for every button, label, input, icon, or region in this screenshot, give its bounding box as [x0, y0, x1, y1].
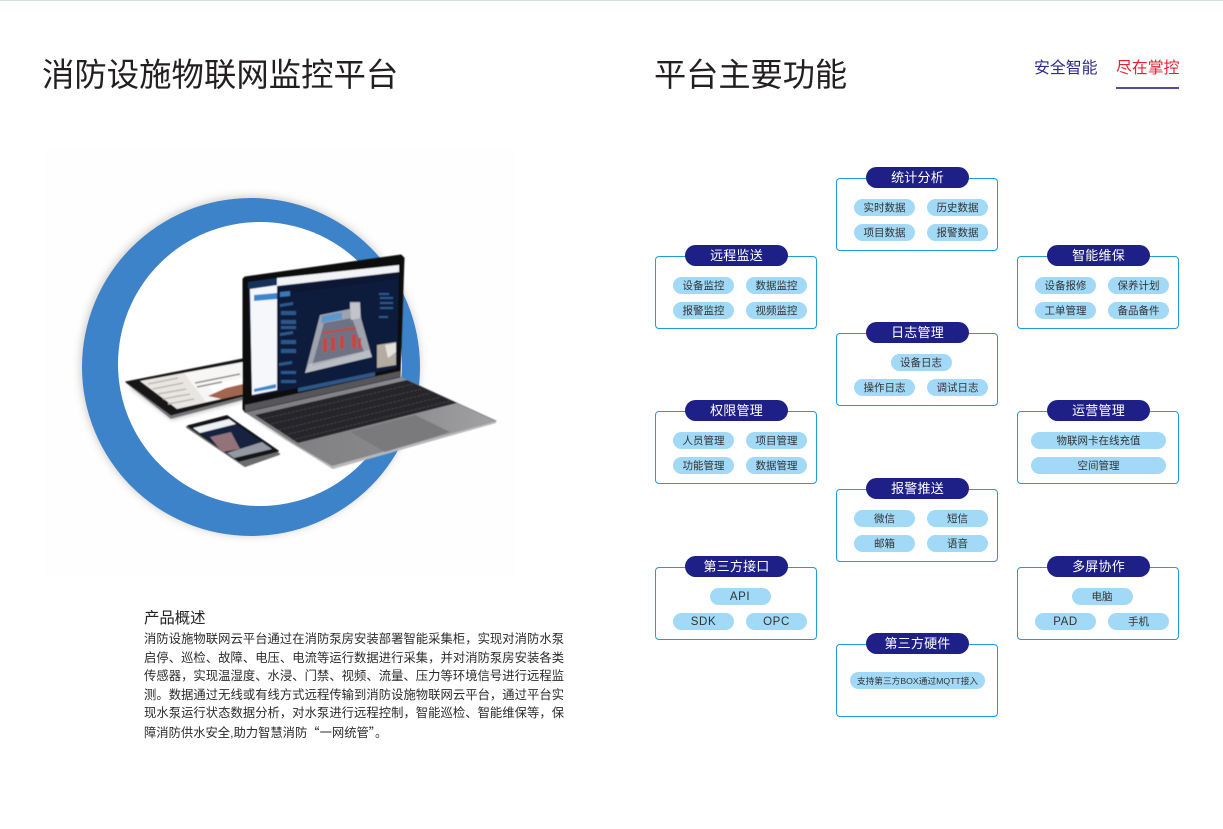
tag	[927, 199, 988, 216]
heading: 多屏协作: 多屏协作	[1072, 559, 1125, 574]
tag: 数据监控	[756, 280, 798, 292]
tag: 工单管理	[1044, 305, 1086, 317]
laptop base	[245, 377, 496, 468]
tag: 视频监控	[756, 305, 798, 317]
tag	[746, 613, 807, 630]
heading: 权限管理	[685, 400, 788, 421]
heading: 权限管理: 权限管理	[710, 403, 763, 418]
overview paragraph	[144, 632, 564, 741]
tag: 微信	[874, 513, 895, 525]
tagline	[1034, 59, 1180, 89]
tag: 调试日志	[936, 382, 978, 394]
heading: 智能维保: 智能维保	[1072, 248, 1125, 263]
heading: 第三方硬件: 第三方硬件	[884, 636, 950, 651]
tag	[854, 535, 915, 552]
tag	[710, 588, 770, 605]
tag	[850, 672, 985, 688]
tag	[927, 510, 988, 527]
overview paragraph: 消防设施物联网云平台通过在消防泵房安装部署智能采集柜，实现对消防水泵	[144, 632, 564, 646]
panel: 运营管理	[1017, 400, 1179, 484]
tag	[673, 457, 734, 474]
heading: 运营管理	[1047, 400, 1150, 421]
tag: 语音	[947, 538, 968, 550]
tag: 设备日志	[900, 357, 942, 369]
tag	[854, 224, 915, 241]
heading: 统计分析: 统计分析	[891, 170, 944, 185]
tag	[746, 432, 807, 449]
overview paragraph: 测。数据通过无线或有线方式远程传输到消防设施物联网云平台，通过平台实	[144, 688, 564, 702]
heading: 第三方接口	[685, 556, 788, 577]
tag: OPC	[763, 616, 790, 628]
3D building	[305, 302, 372, 373]
heading: 报警推送	[866, 478, 969, 499]
tag: 电脑	[1092, 591, 1112, 603]
panel: 统计分析	[836, 167, 998, 251]
phone	[187, 416, 279, 466]
tag: 报警监控	[682, 305, 724, 317]
heading: 智能维保	[1047, 245, 1150, 266]
tag	[1031, 457, 1166, 474]
tag: 历史数据	[936, 202, 978, 214]
tag: 物联网卡在线充值	[1056, 435, 1140, 447]
side panels on screen	[279, 293, 393, 392]
tag	[854, 199, 915, 216]
tag	[927, 224, 988, 241]
heading: 第三方硬件	[866, 633, 969, 654]
tagline: 尽在掌控	[1116, 60, 1180, 77]
title: right page: 平台主要功能	[654, 57, 847, 93]
tag: 短信	[947, 513, 968, 525]
tag	[1035, 277, 1096, 294]
tag	[746, 302, 807, 319]
tag	[927, 535, 988, 552]
tag	[1031, 432, 1166, 449]
top edge line	[0, 0, 1223, 1]
overview paragraph: 启停、巡检、故障、电压、电流等运行数据进行采集，并对消防泵房安装各类	[144, 651, 564, 665]
tag: 报警数据	[936, 227, 978, 239]
panel: 报警推送	[836, 478, 998, 562]
title: left page: 消防设施物联网监控平台	[42, 57, 398, 93]
panel: 远程监送	[655, 245, 817, 329]
overview heading: 产品概述	[144, 610, 206, 627]
tag: 保养计划	[1118, 280, 1160, 292]
heading: 报警推送: 报警推送	[891, 481, 944, 496]
tag: 数据管理	[756, 460, 798, 472]
tag	[1108, 277, 1169, 294]
tag: 功能管理	[682, 460, 724, 472]
overview paragraph: 传感器，实现温湿度、水浸、门禁、视频、流量、压力等环境信号进行远程监	[144, 669, 564, 683]
tag: API	[730, 591, 750, 603]
tag: 设备监控	[682, 280, 724, 292]
laptop screen	[243, 255, 404, 412]
heading: 统计分析	[866, 167, 969, 188]
heading: 日志管理	[866, 322, 969, 343]
overview paragraph: 现水泵运行状态数据分析，对水泵进行远程控制，智能巡检、智能维保等，保	[144, 706, 564, 720]
heading: 运营管理: 运营管理	[1072, 403, 1125, 418]
panel: 智能维保	[1017, 245, 1179, 329]
tag	[673, 302, 734, 319]
tag	[927, 379, 988, 396]
heading: 多屏协作	[1047, 556, 1150, 577]
tag	[673, 432, 734, 449]
tag	[854, 379, 915, 396]
tablet	[128, 386, 243, 420]
panel: 第三方接口	[655, 556, 817, 640]
tag: 项目管理	[756, 435, 798, 447]
tag	[673, 277, 734, 294]
heading: 远程监送: 远程监送	[710, 248, 763, 263]
tag	[746, 277, 807, 294]
tag	[1035, 613, 1096, 630]
tag: PAD	[1053, 616, 1078, 628]
tag: 操作日志	[864, 382, 906, 394]
panel: 第三方硬件	[836, 633, 998, 717]
tag	[746, 457, 807, 474]
tag: 邮箱	[874, 538, 895, 550]
heading: 日志管理: 日志管理	[891, 325, 944, 340]
tag: 设备报修	[1044, 280, 1086, 292]
tag: 项目数据	[864, 227, 906, 239]
tag	[1108, 302, 1169, 319]
panel: 多屏协作	[1017, 556, 1179, 640]
tag: 人员管理	[682, 435, 724, 447]
tag	[1108, 613, 1169, 630]
tag	[1035, 302, 1096, 319]
tag	[890, 354, 952, 371]
tag: 支持第三方BOX通过MQTT接入	[857, 676, 978, 686]
panel: 日志管理	[836, 322, 998, 406]
overview paragraph: 障消防供水安全,助力智慧消防“一网统管”。	[144, 723, 387, 741]
heading: 远程监送	[685, 245, 788, 266]
tag: 空间管理	[1078, 460, 1120, 472]
tag	[854, 510, 915, 527]
product illustration: ring and devices	[76, 192, 497, 540]
tag: 实时数据	[864, 202, 906, 214]
tag	[673, 613, 734, 630]
panel: 权限管理	[655, 400, 817, 484]
tagline: 安全智能	[1034, 60, 1098, 77]
tag	[1072, 588, 1132, 605]
tag: SDK	[691, 616, 716, 628]
tag: 手机	[1128, 616, 1149, 628]
tag: 备品备件	[1118, 305, 1160, 317]
heading: 第三方接口: 第三方接口	[703, 559, 770, 574]
